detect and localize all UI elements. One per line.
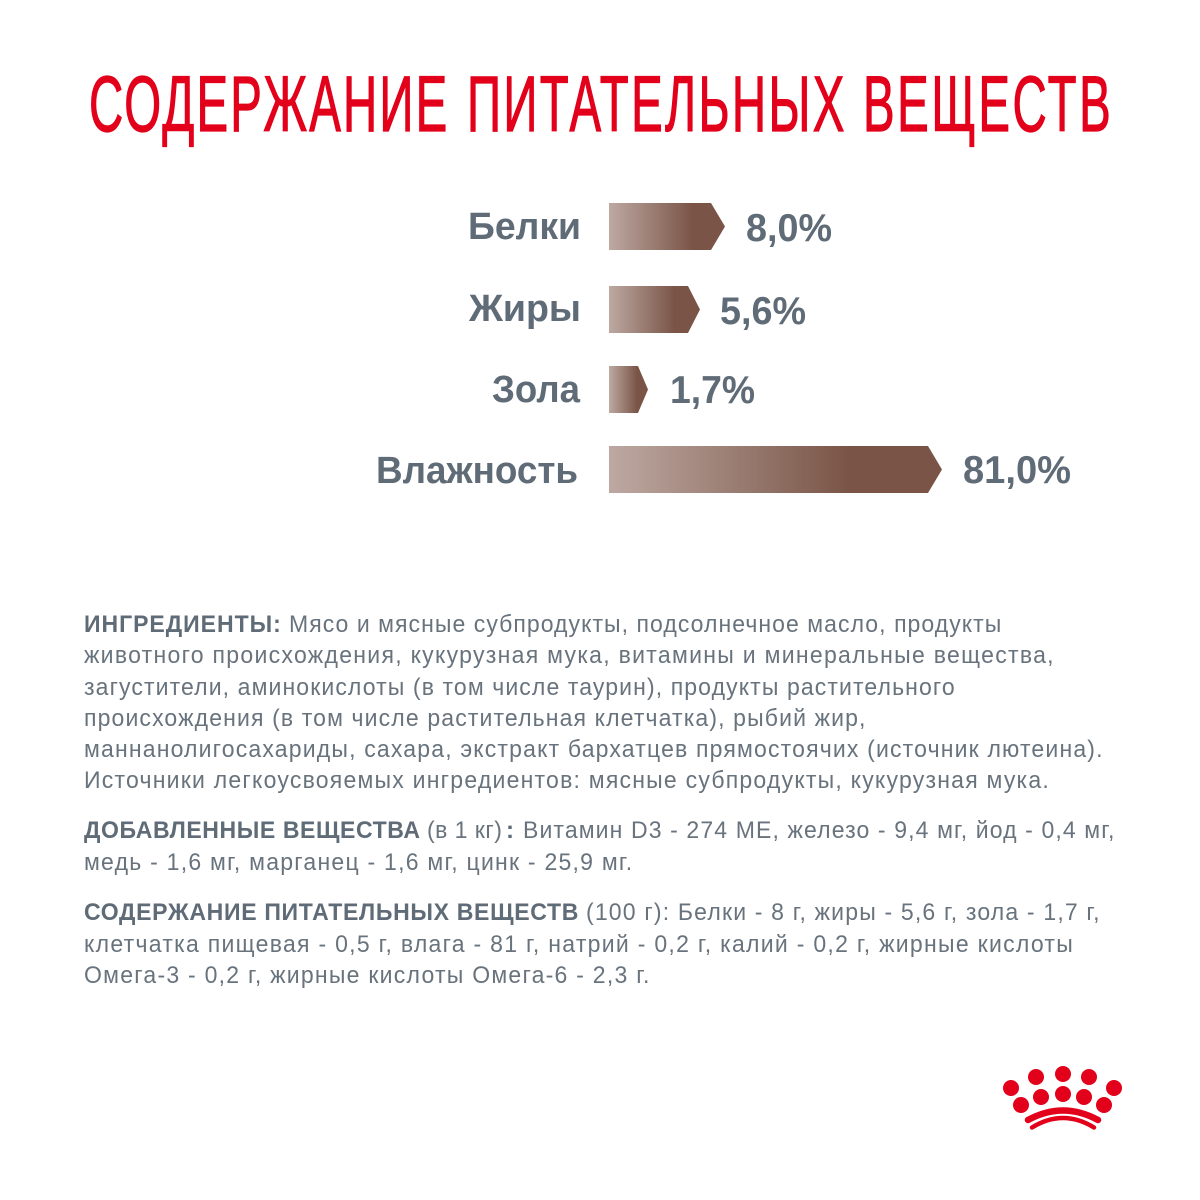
text block: ingredients (84, 611, 1103, 793)
text block: additives: Витамин D3 - 274 МЕ, железо - 9,4 мг, йод - 0,4 мг, (523, 817, 1114, 843)
icon: crown logo (1003, 1066, 1122, 1128)
text block: ingredients: животного происхождения, кукурузная мука, витамины и минеральные вещества, (84, 642, 1054, 668)
row: Зола: 1,7% (670, 369, 755, 412)
text block: nutrient content: СОДЕРЖАНИЕ ПИТАТЕЛЬНЫХ ВЕЩЕСТВ (84, 899, 578, 925)
row: Влажность: Влажность (376, 450, 578, 492)
row: Жиры: Жиры (468, 288, 581, 330)
row: Влажность: 81,0% (963, 449, 1071, 492)
title: СОДЕРЖАНИЕ (89, 59, 447, 148)
text block: nutrient content: (100 г): Белки - 8 г, жиры - 5,6 г, зола - 1,7 г, (586, 899, 1100, 925)
text block: ingredients: происхождения (в том числе растительная клетчатка), рыбий жир, (84, 705, 865, 731)
row: Зола: Зола (492, 369, 581, 411)
text block: ingredients: ИНГРЕДИЕНТЫ: (84, 611, 281, 637)
text block: ingredients: маннанолигосахариды, сахара, экстракт бархатцев прямостоячих (источник лютеина). (84, 736, 1103, 762)
row: Жиры (468, 286, 806, 333)
text block: ingredients: Источники легкоусвояемых ингредиентов: мясные субпродукты, кукурузная мука. (84, 767, 1049, 793)
title: ВЕЩЕСТВ (863, 59, 1111, 148)
title: ПИТАТЕЛЬНЫХ (467, 59, 844, 148)
text block: nutrient content (84, 899, 1100, 988)
text block: nutrient content: Омега-3 - 0,2 г, жирные кислоты Омега-6 - 2,3 г. (84, 962, 649, 988)
text block: additives: ДОБАВЛЕННЫЕ ВЕЩЕСТВА (84, 817, 420, 843)
row: Зола (492, 366, 755, 413)
text block: additives (84, 817, 1114, 875)
row: Белки (468, 203, 832, 250)
bar chart (376, 203, 1071, 493)
row: Жиры: 5,6% (720, 290, 806, 333)
title (89, 59, 1111, 148)
row: Влажность (376, 446, 1071, 493)
text block: nutrient content: клетчатка пищевая - 0,5 г, влага - 81 г, натрий - 0,2 г, калий - 0,2 г, жирные кислоты (84, 931, 1073, 957)
text block: ingredients: Мясо и мясные субпродукты, подсолнечное масло, продукты (289, 611, 1001, 637)
text block: additives: медь - 1,6 мг, марганец - 1,6 мг, цинк - 25,9 мг. (84, 849, 632, 875)
text block: additives: : (506, 817, 514, 844)
row: Белки: 8,0% (746, 207, 832, 250)
row: Белки: Белки (468, 206, 581, 248)
text block: additives: (в 1 кг) (427, 817, 502, 843)
text block: ingredients: загустители, аминокислоты (в том числе таурин), продукты растительного (84, 674, 955, 700)
